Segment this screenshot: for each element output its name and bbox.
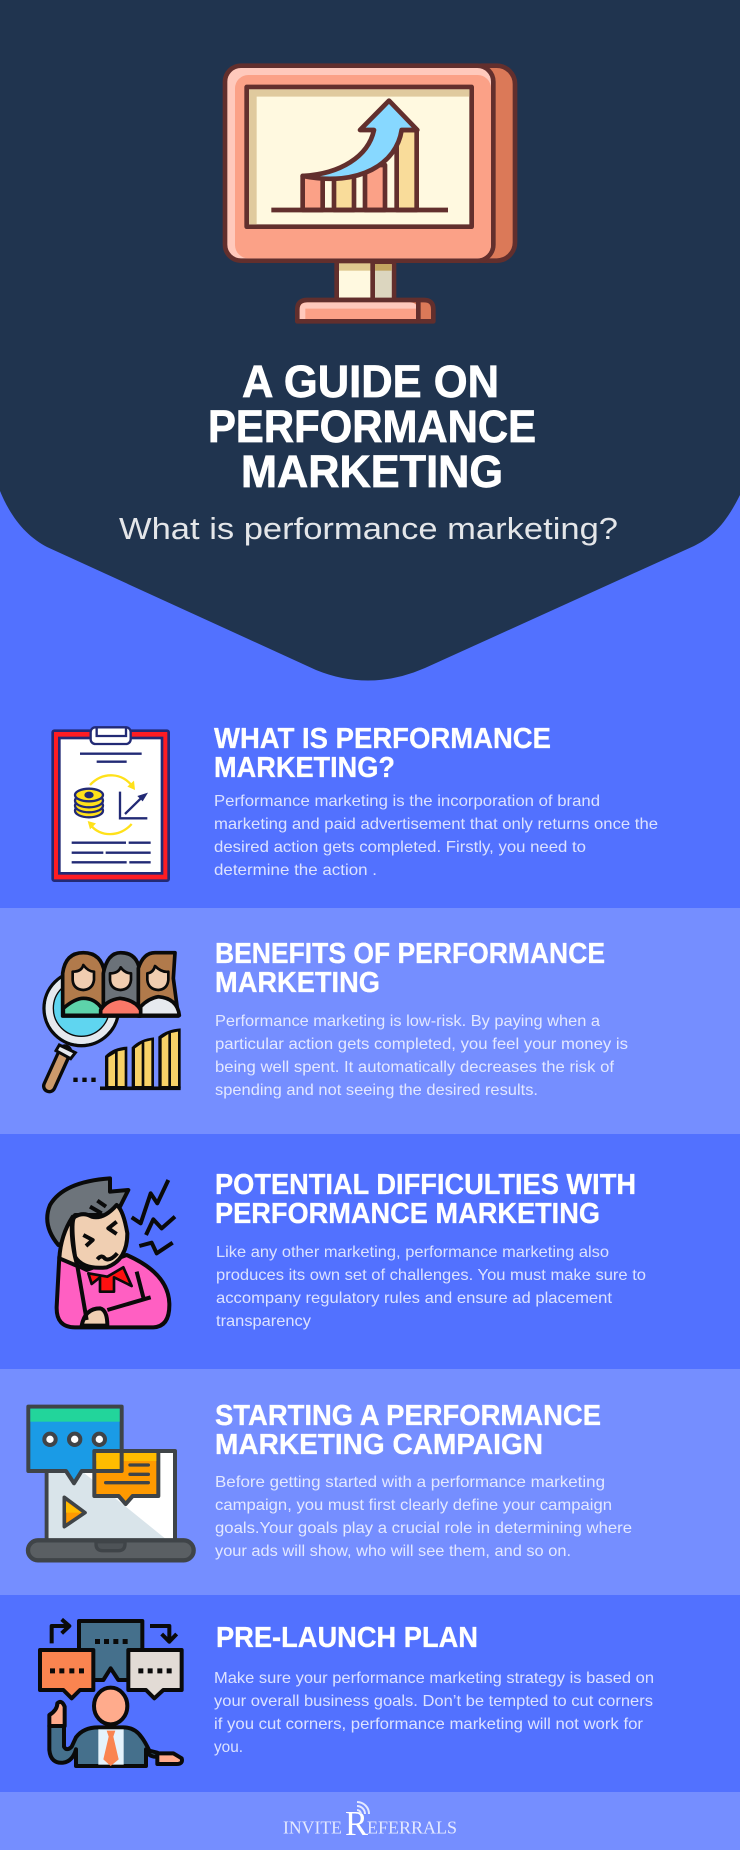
body text: produces its own set of challenges. You must make sure to [216,1267,646,1284]
body text [214,793,658,879]
heading: MARKETING [215,967,380,999]
body text: being well spent. It automatically decreases the risk of [215,1059,615,1076]
heading [214,723,551,784]
panel: what is performance marketing [53,723,658,881]
body text: you. [214,1739,243,1756]
body text: spending and not seeing the desired results. [215,1082,538,1099]
body text: Make sure your performance marketing strategy is based on [214,1670,654,1687]
body text: particular action gets completed, you feel your money is [215,1036,628,1053]
icon: stressed man [47,1178,175,1327]
body text: campaign, you must first clearly define your campaign [215,1497,612,1514]
body text: Performance marketing is the incorporation of brand [214,793,600,810]
body text: if you cut corners, performance marketing will not work for [214,1716,644,1733]
body text: desired action gets completed. Firstly, you need to [214,839,586,856]
heading: MARKETING? [214,752,395,784]
panel: potential difficulties [47,1169,646,1330]
body text: your ads will show, who will see them, and so on. [215,1543,571,1560]
icon: clipboard [53,727,169,881]
body text: Before getting started with a performance marketing [215,1474,605,1491]
heading: POTENTIAL DIFFICULTIES WITH [215,1169,636,1201]
body text: Performance marketing is low-risk. By paying when a [215,1013,600,1030]
logo: InviteReferrals [283,1802,457,1843]
icon: laptop with chat bubbles [28,1407,194,1560]
body text: your overall business goals. Don’t be tempted to cut corners [214,1693,653,1710]
body text: accompany regulatory rules and ensure ad placement [216,1290,613,1307]
body text: determine the action . [214,862,377,879]
heading: STARTING A PERFORMANCE [215,1400,601,1432]
body text [215,1474,632,1560]
body text: Like any other marketing, performance marketing also [216,1244,609,1261]
body text [216,1244,646,1330]
logo: InviteReferrals: INVITE [283,1818,342,1838]
logo: InviteReferrals: EFERRALS [367,1818,457,1838]
panel: benefits [0,908,740,1134]
panel: starting a campaign [0,1369,740,1595]
icon: monitor with growth chart [225,66,515,321]
title: A GUIDE ON [242,356,499,407]
heading [215,1400,601,1461]
footer band [0,1792,740,1850]
heading [215,1169,636,1230]
heading: BENEFITS OF PERFORMANCE [215,938,605,970]
heading [215,938,605,999]
icon: magnifier with people and bars [44,953,181,1088]
body text: goals.Your goals play a crucial role in determining where [215,1520,632,1537]
heading: MARKETING CAMPAIGN [215,1429,543,1461]
heading: WHAT IS PERFORMANCE [214,723,551,755]
icon: presenter with speech bubbles [40,1619,182,1766]
heading: PERFORMANCE MARKETING [215,1198,600,1230]
logo: InviteReferrals: R [345,1804,369,1843]
title: PERFORMANCE [208,401,536,452]
heading: PRE-LAUNCH PLAN [216,1622,478,1654]
body text [215,1013,628,1099]
title: MARKETING [241,446,503,497]
body text: transparency [216,1313,311,1330]
header panel [0,0,740,681]
body text [214,1670,654,1756]
subtitle: What is performance marketing? [119,511,618,546]
panel: pre-launch plan [40,1619,654,1766]
title [208,356,536,497]
body text: marketing and paid advertisement that only returns once the [214,816,658,833]
